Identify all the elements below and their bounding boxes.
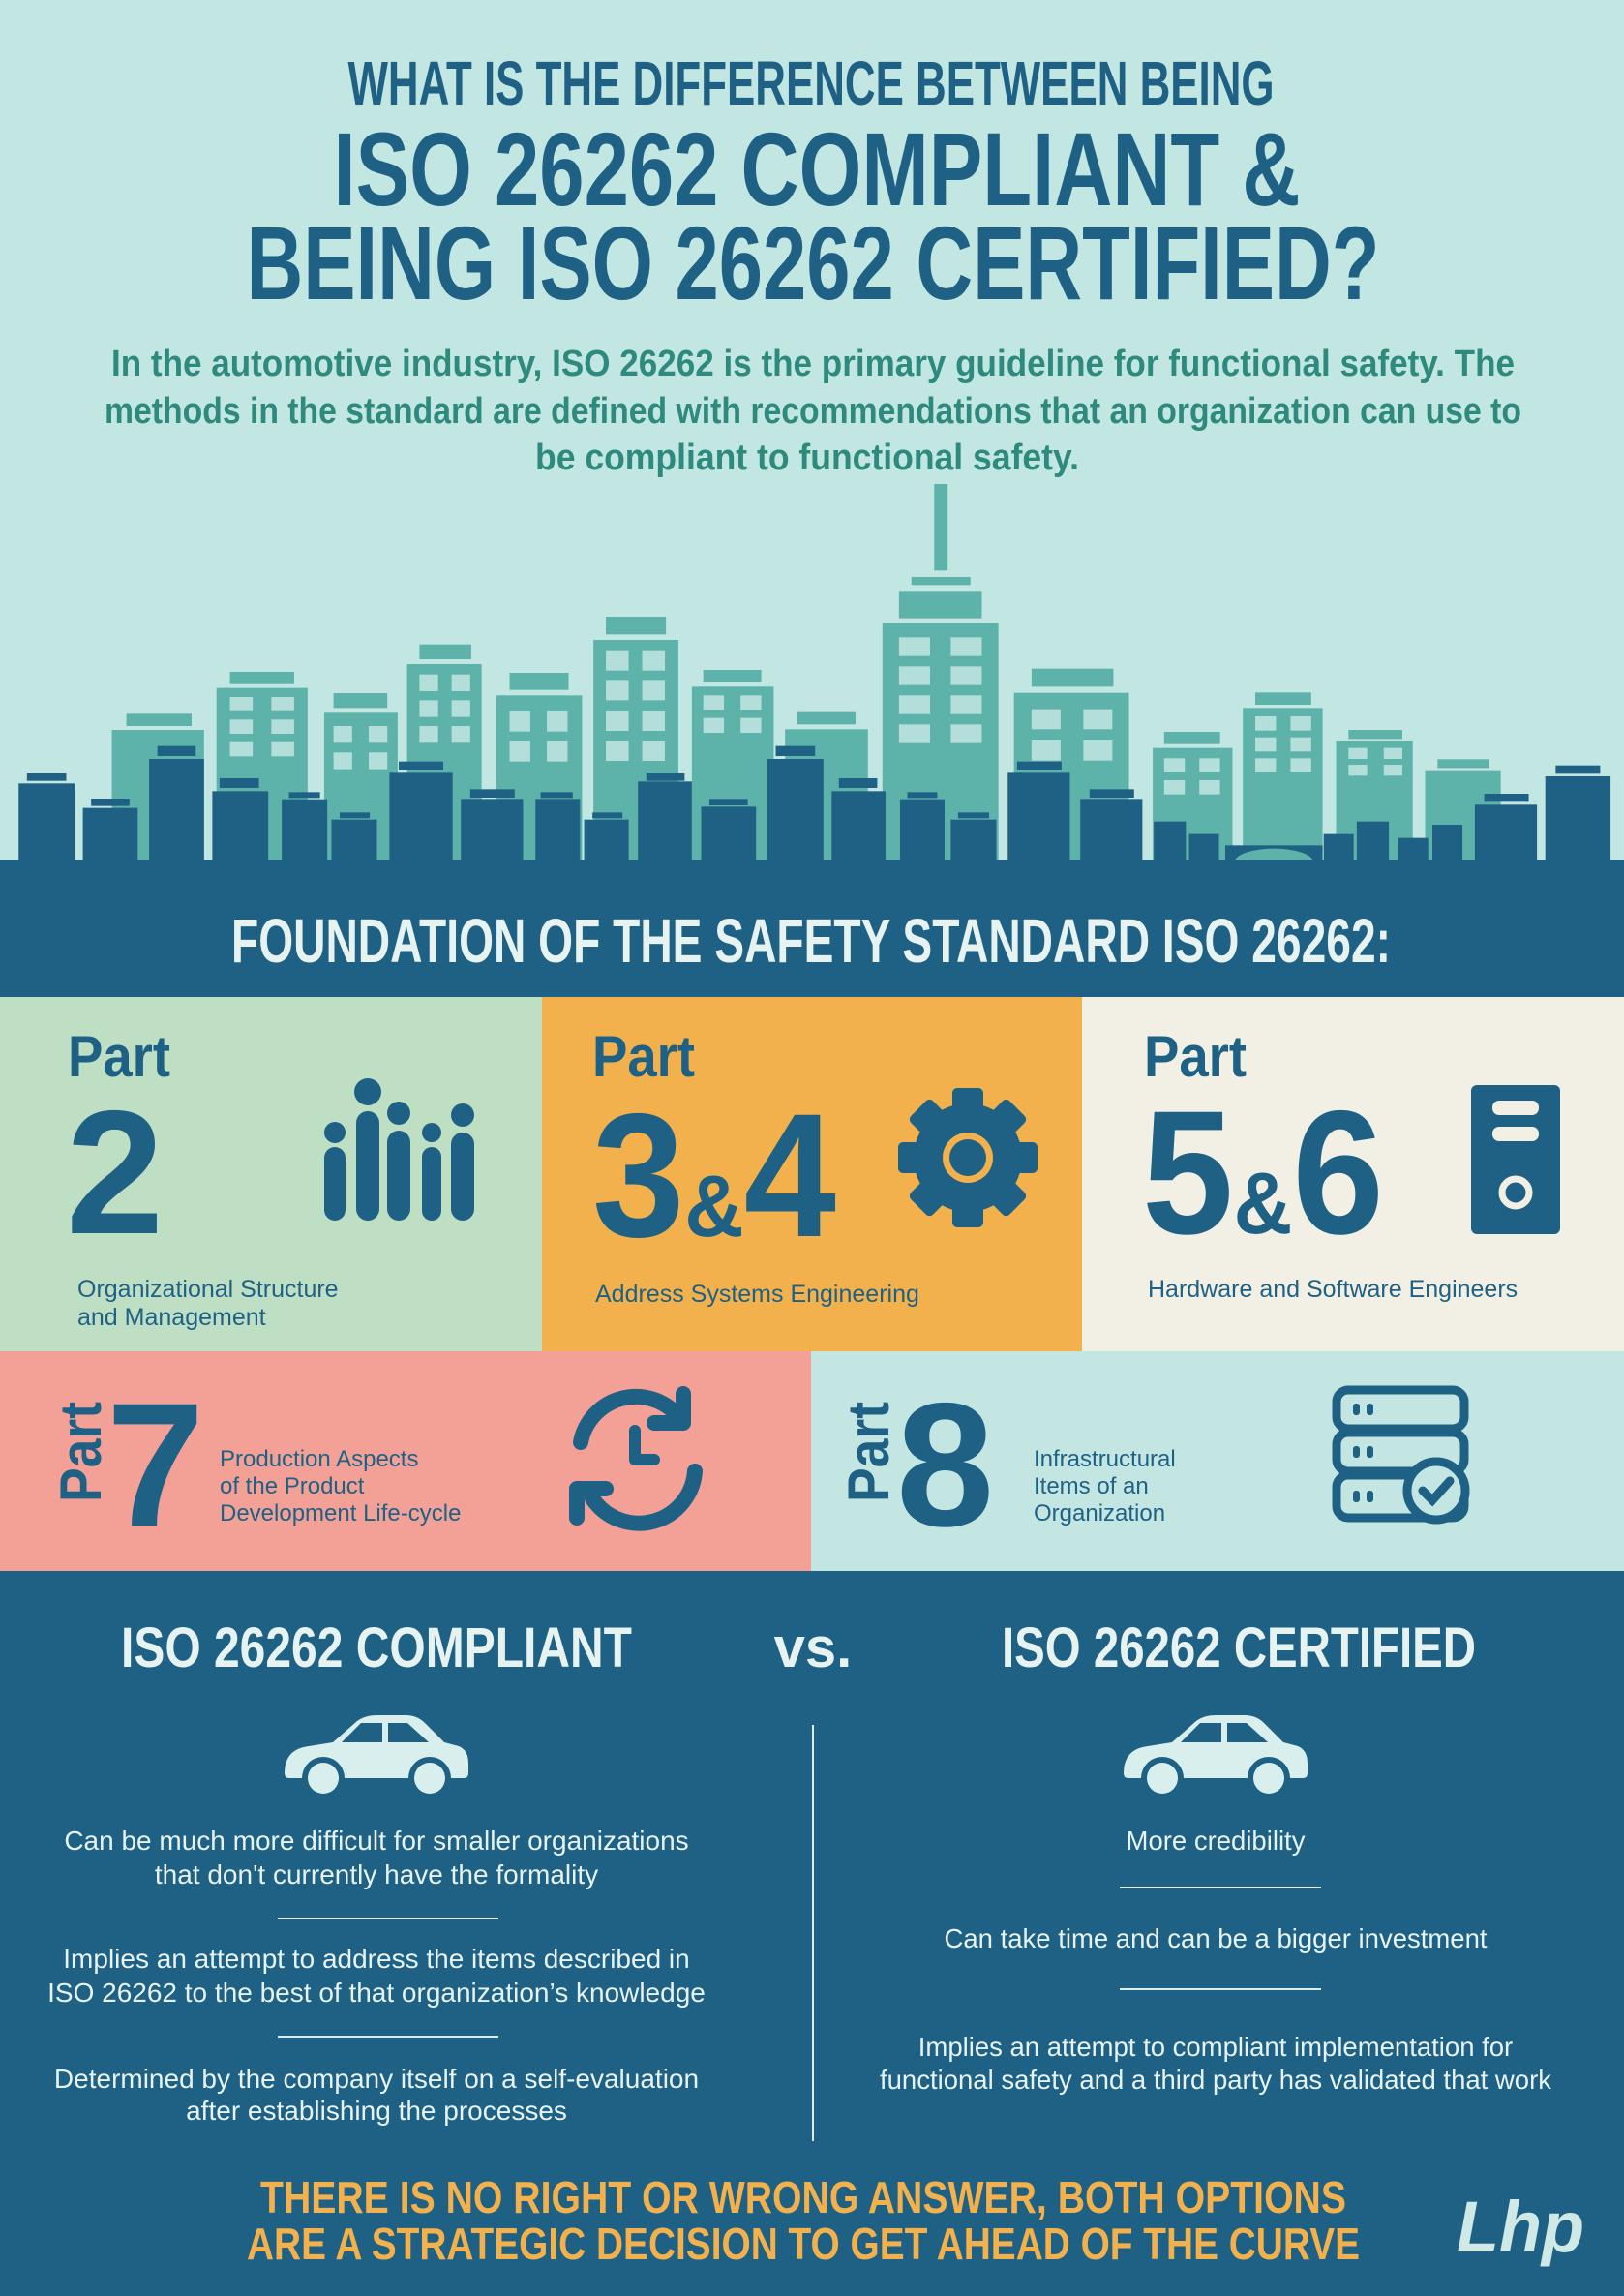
panel: part 7: of the Product: [220, 1473, 365, 1499]
icon: car left: [285, 1715, 468, 1799]
panel: part 2: [0, 997, 542, 1351]
conclusion text: ARE A STRATEGIC DECISION TO GET AHEAD OF THE CURVE: [247, 2219, 1360, 2269]
conclusion text: [247, 2172, 1360, 2269]
panel: part 8: Part: [836, 1402, 901, 1502]
icon: server stack check: [1337, 1390, 1465, 1520]
panel: part 8: Infrastructural: [1034, 1446, 1176, 1472]
text: compliant points: after establishing the processes: [186, 2096, 567, 2126]
text: compliant points: [47, 1826, 706, 2126]
icon: car right: [1124, 1715, 1308, 1799]
panel: part 8: [811, 1351, 1624, 1571]
skyline illustration: [0, 484, 1624, 893]
text: compliant points: Can be much more difficult for smaller organizations: [64, 1826, 689, 1856]
text: certified points: Can take time and can be a bigger investment: [944, 1923, 1488, 1953]
icon: gear: [898, 1088, 1038, 1227]
panel: part 2: and Management: [77, 1304, 266, 1331]
text: compliant points: that don't currently have the formality: [155, 1859, 598, 1889]
text: certified points: [880, 1826, 1551, 2095]
heading: certified: ISO 26262 CERTIFIED: [1002, 1616, 1476, 1679]
panel: part 2: Part: [68, 1024, 170, 1089]
icon: people: [324, 1078, 474, 1221]
panel: part 8: 8: [896, 1366, 994, 1563]
subtitle: [105, 344, 1521, 478]
panel: part 3&4: Address Systems Engineering: [595, 1281, 919, 1308]
text: compliant points: ISO 26262 to the best of that organization’s knowledge: [47, 1978, 706, 2008]
panel: part 8: Organization: [1034, 1500, 1165, 1526]
panel: part 5&6: Hardware and Software Engineers: [1148, 1276, 1518, 1303]
header band: [0, 860, 1624, 997]
panel: part 2: 2: [66, 1073, 164, 1271]
text: certified points: More credibility: [1127, 1826, 1306, 1856]
panel: part 3&4: 3&4: [592, 1076, 836, 1274]
panel: part 3&4: Part: [592, 1024, 695, 1089]
panel: part 7: Part: [48, 1402, 113, 1502]
title: [246, 48, 1380, 321]
panel: part 7: Production Aspects: [220, 1446, 418, 1472]
text: compliant points: Determined by the company itself on a self-evaluation: [54, 2064, 699, 2094]
icon: refresh clock: [577, 1394, 695, 1524]
subtitle: be compliant to functional safety.: [535, 438, 1079, 478]
panel: part 7: [0, 1351, 811, 1571]
text: compliant points: Implies an attempt to address the items described in: [63, 1944, 690, 1974]
conclusion text: THERE IS NO RIGHT OR WRONG ANSWER, BOTH OPTIONS: [260, 2172, 1346, 2222]
panel: part 2: Organizational Structure: [77, 1276, 339, 1303]
logo: Lhp: [1457, 2187, 1584, 2267]
vs label: vs.: [774, 1616, 852, 1679]
text: certified points: Implies an attempt to compliant implementation for: [918, 2032, 1513, 2062]
panel: part 5&6: 5&6: [1142, 1073, 1384, 1271]
panel: part 5&6: Part: [1144, 1024, 1247, 1089]
panel: part 8: Items of an: [1034, 1473, 1149, 1499]
icon: server tower: [1471, 1085, 1560, 1234]
comparison section: [0, 1571, 1624, 2296]
panel: part 7: Development Life-cycle: [220, 1500, 461, 1526]
heading: compliant: ISO 26262 COMPLIANT: [121, 1616, 632, 1679]
panel: part 3&4: [542, 997, 1082, 1351]
panel: part 5&6: [1082, 997, 1624, 1351]
title: ISO 26262 COMPLIANT &: [333, 110, 1301, 227]
subtitle: In the automotive industry, ISO 26262 is the primary guideline for functional safety. The: [111, 344, 1515, 384]
panel: part 7: 7: [106, 1366, 204, 1563]
text: certified points: functional safety and a third party has validated that work: [880, 2065, 1551, 2095]
